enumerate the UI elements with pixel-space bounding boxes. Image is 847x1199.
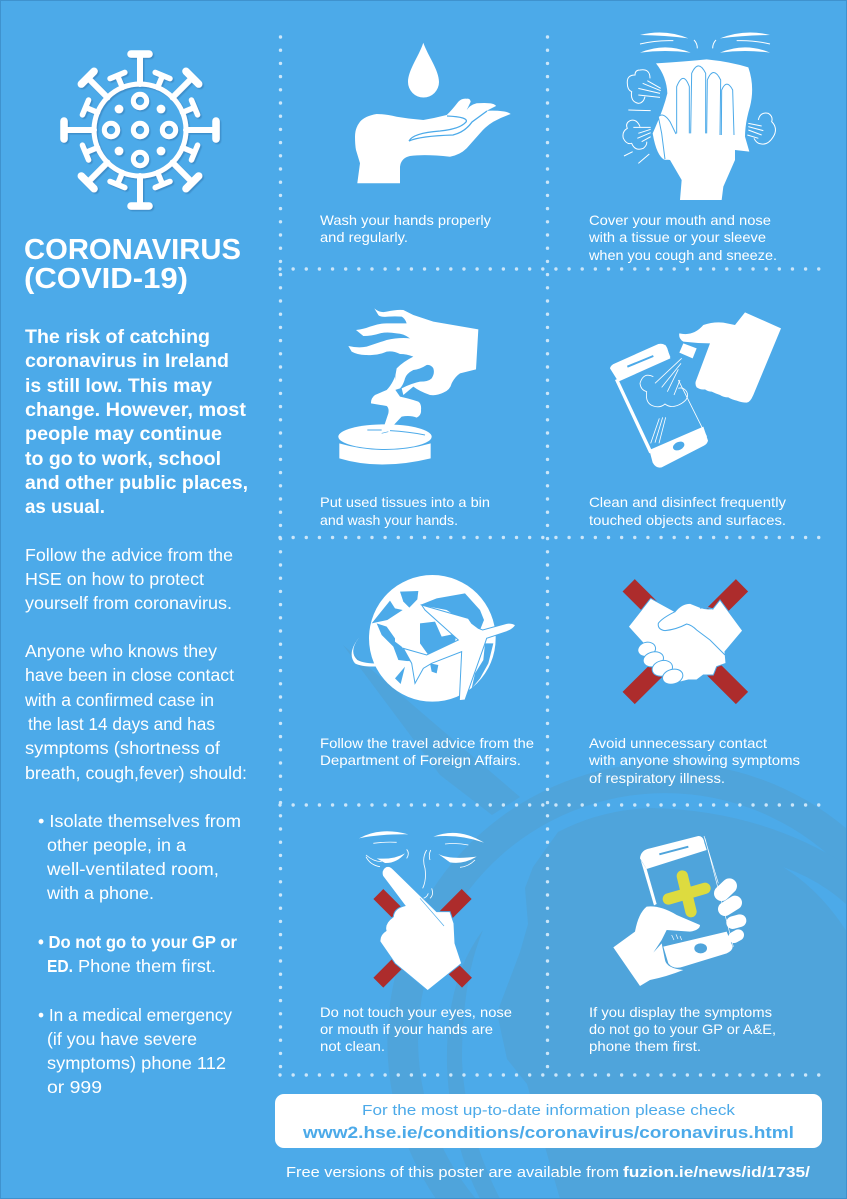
intro paragraph: risk statement: people may continue bbox=[25, 423, 222, 445]
panel: travel advice bbox=[320, 575, 534, 768]
title: (COVID-19) bbox=[24, 263, 188, 295]
caption: Department of Foreign Affairs. bbox=[320, 752, 521, 768]
bullet: do not go to GP: ED. bbox=[47, 956, 73, 976]
icon: globe and plane bbox=[352, 575, 516, 702]
caption bbox=[589, 494, 786, 528]
icon: hand with tissue bbox=[623, 32, 775, 200]
text: close contact advice: Anyone who knows they bbox=[25, 641, 217, 661]
intro paragraph: risk statement: to go to work, school bbox=[25, 448, 221, 470]
bullet: medical emergency: symptoms) phone 112 bbox=[47, 1053, 226, 1073]
text: follow HSE advice: Follow the advice from the bbox=[25, 545, 233, 565]
caption: Follow the travel advice from the bbox=[320, 735, 534, 751]
caption: and wash your hands. bbox=[320, 512, 458, 528]
panel: clean and disinfect bbox=[589, 312, 786, 528]
footer note: Free versions of this poster are available from bbox=[286, 1165, 619, 1181]
panel: avoid contact bbox=[588, 585, 800, 786]
caption: touched objects and surfaces. bbox=[589, 512, 786, 528]
caption: with a tissue or your sleeve bbox=[588, 229, 766, 245]
intro paragraph: risk statement: coronavirus in Ireland bbox=[25, 350, 229, 372]
caption: Wash your hands properly bbox=[320, 212, 491, 228]
text: follow HSE advice: HSE on how to protect bbox=[25, 569, 204, 589]
icon: coronavirus bbox=[64, 54, 216, 206]
intro paragraph: risk statement: and other public places, bbox=[25, 472, 248, 494]
caption: phone them first. bbox=[589, 1038, 701, 1054]
caption: Put used tissues into a bin bbox=[320, 494, 490, 510]
caption: If you display the symptoms bbox=[589, 1004, 772, 1020]
icon: spraying a phone bbox=[610, 312, 781, 468]
caption bbox=[320, 212, 491, 245]
icon: hand with water drop bbox=[355, 43, 511, 183]
text: close contact advice: the last 14 days and has bbox=[28, 714, 215, 734]
bullet: do not go to GP: • Do not go to your GP or bbox=[38, 932, 237, 952]
text: follow HSE advice: yourself from coronavirus. bbox=[25, 593, 232, 613]
caption: of respiratory illness. bbox=[589, 770, 725, 786]
background watermark: large virus bbox=[343, 645, 847, 1199]
caption bbox=[589, 1004, 776, 1054]
intro paragraph: risk statement: as usual. bbox=[25, 496, 105, 518]
caption: Cover your mouth and nose bbox=[589, 212, 771, 228]
bullet: medical emergency: (if you have severe bbox=[47, 1029, 197, 1049]
caption: or mouth if your hands are bbox=[320, 1021, 493, 1037]
bullet: medical emergency bbox=[38, 1005, 232, 1097]
caption: when you cough and sneeze. bbox=[588, 247, 777, 263]
icon: crossed-out handshake bbox=[628, 585, 743, 698]
icon: hand holding phone with yellow cross bbox=[613, 836, 740, 986]
text: close contact advice: breath, cough,fever) should: bbox=[25, 763, 247, 783]
caption bbox=[588, 735, 800, 786]
title: CORONAVIRUS bbox=[24, 234, 241, 266]
icon: hand dropping tissue into bin bbox=[338, 308, 478, 464]
bullet: do not go to GP bbox=[38, 932, 237, 976]
footer note: fuzion.ie/news/id/1735/ bbox=[623, 1165, 810, 1181]
caption: not clean. bbox=[320, 1038, 385, 1054]
text: close contact advice bbox=[24, 641, 247, 783]
caption: Do not touch your eyes, nose bbox=[320, 1004, 512, 1020]
caption: and regularly. bbox=[320, 229, 408, 245]
bullet: medical emergency: or 999 bbox=[47, 1077, 102, 1097]
callout: more information box: www2.hse.ie/conditions/coronavirus/coronavirus.html bbox=[302, 1123, 794, 1142]
bullet: isolate bbox=[38, 811, 241, 903]
intro paragraph: risk statement: change. However, most bbox=[25, 399, 247, 421]
intro paragraph: risk statement: The risk of catching bbox=[25, 326, 210, 348]
caption bbox=[320, 735, 534, 768]
callout: more information box: For the most up-to-date information please check bbox=[362, 1102, 736, 1119]
caption: Avoid unnecessary contact bbox=[589, 735, 767, 751]
caption: do not go to your GP or A&E, bbox=[589, 1021, 776, 1037]
intro paragraph: risk statement: is still low. This may bbox=[25, 375, 212, 397]
text: close contact advice: have been in close contact bbox=[25, 665, 234, 685]
bullet: isolate: • Isolate themselves from bbox=[38, 811, 241, 831]
caption: Clean and disinfect frequently bbox=[589, 494, 786, 510]
bullet: isolate: with a phone. bbox=[46, 883, 154, 903]
bullet: medical emergency: • In a medical emergency bbox=[38, 1005, 232, 1025]
footer note bbox=[286, 1165, 810, 1181]
panel: wash hands bbox=[320, 43, 511, 245]
callout: more information box bbox=[275, 1094, 822, 1148]
panel: do not touch face bbox=[320, 831, 512, 1054]
panel: cover mouth and nose bbox=[588, 32, 777, 263]
title bbox=[24, 234, 241, 295]
panel: put tissues in a bin bbox=[320, 308, 490, 528]
text: close contact advice: symptoms (shortness of bbox=[25, 738, 220, 758]
bullet: do not go to GP: Phone them first. bbox=[78, 956, 216, 976]
caption bbox=[320, 494, 490, 528]
bullet: isolate: other people, in a bbox=[47, 835, 186, 855]
text: follow HSE advice bbox=[25, 545, 233, 613]
caption bbox=[320, 1004, 512, 1054]
text: close contact advice: with a confirmed case in bbox=[24, 690, 214, 710]
icon: finger near eyes with red cross bbox=[359, 831, 484, 991]
intro paragraph: risk statement bbox=[25, 326, 248, 518]
left column bbox=[24, 54, 248, 1097]
caption bbox=[588, 212, 777, 263]
caption: with anyone showing symptoms bbox=[588, 752, 800, 768]
panel: phone first bbox=[589, 836, 776, 1054]
bullet: isolate: well-ventilated room, bbox=[46, 859, 219, 879]
